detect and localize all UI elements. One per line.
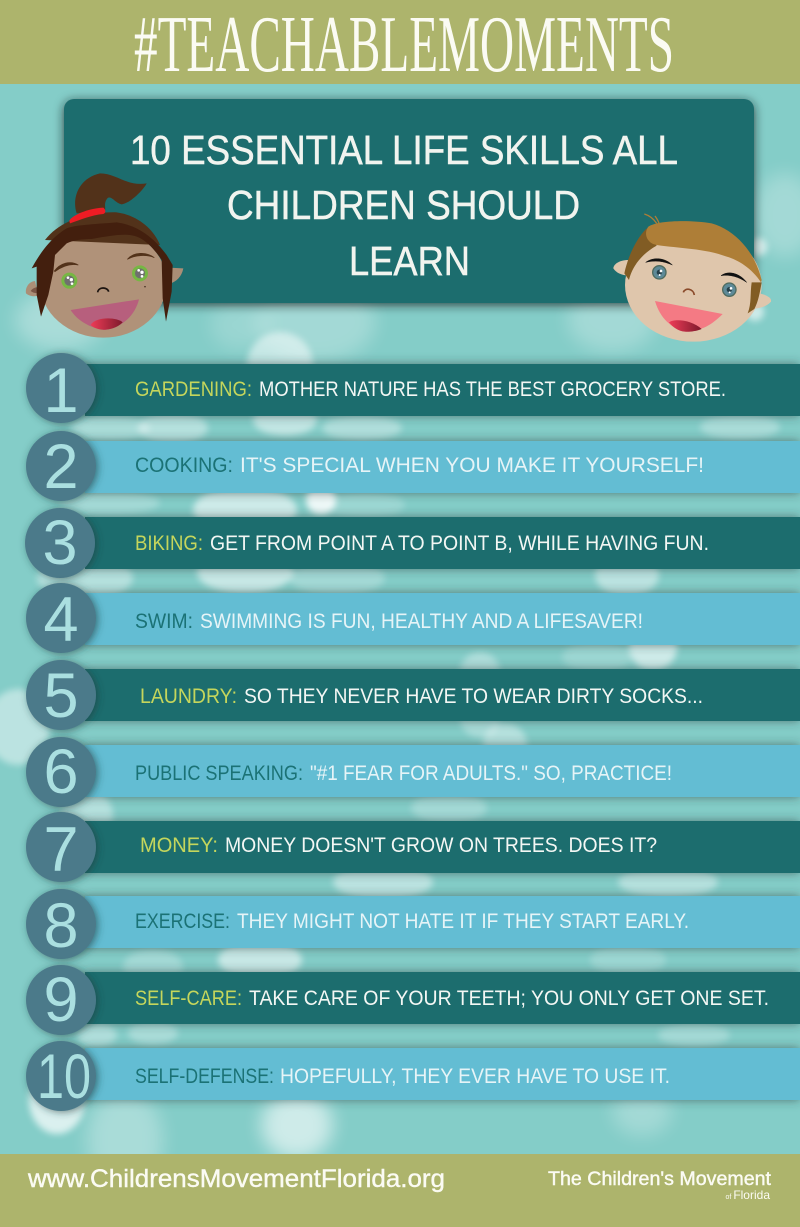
- skill 6: [26, 737, 800, 807]
- bar: [85, 517, 800, 569]
- number badge: [26, 812, 96, 882]
- description text: IT'S SPECIAL WHEN YOU MAKE IT YOURSELF!: [240, 454, 704, 477]
- numeral: 2: [43, 432, 79, 502]
- bar: [85, 593, 800, 645]
- numeral: 3: [42, 508, 78, 578]
- bar: [85, 669, 800, 721]
- description text: SWIMMING IS FUN, HEALTHY AND A LIFESAVER!: [200, 610, 643, 633]
- number badge: [25, 508, 95, 578]
- heading text: CHILDREN SHOULD: [227, 182, 580, 228]
- heading text: 10 ESSENTIAL LIFE SKILLS ALL: [130, 127, 678, 173]
- header band: [0, 0, 800, 84]
- footer logo text: [548, 1169, 772, 1202]
- panel background: [64, 99, 754, 303]
- bar: [85, 745, 800, 797]
- skill 9: [26, 965, 800, 1035]
- bar: [85, 972, 800, 1024]
- number badge: [26, 353, 96, 423]
- label text: SELF-CARE:: [135, 987, 242, 1010]
- label text: GARDENING:: [135, 378, 252, 401]
- footer band: [0, 1154, 800, 1227]
- number badge: [26, 965, 96, 1035]
- label text: COOKING:: [135, 454, 233, 477]
- bar: [85, 441, 800, 493]
- label text: SELF-DEFENSE:: [135, 1065, 274, 1088]
- icon: boy face: [613, 214, 771, 342]
- label text: SWIM:: [135, 610, 193, 633]
- description text: TAKE CARE OF YOUR TEETH; YOU ONLY GET ONE SET.: [249, 987, 769, 1010]
- numeral: 7: [43, 815, 79, 885]
- number badge: [26, 737, 96, 807]
- description text: GET FROM POINT A TO POINT B, WHILE HAVING FUN.: [210, 532, 709, 555]
- bar: [85, 364, 800, 416]
- label text: EXERCISE:: [135, 910, 230, 933]
- numeral: 8: [43, 891, 79, 961]
- label text: PUBLIC SPEAKING:: [135, 762, 303, 785]
- description text: MOTHER NATURE HAS THE BEST GROCERY STORE.: [259, 378, 726, 401]
- numeral: 10: [37, 1042, 91, 1112]
- footer logo text: of Florida: [726, 1188, 770, 1202]
- skill 3: [25, 508, 800, 578]
- description text: THEY MIGHT NOT HATE IT IF THEY START EARLY.: [237, 910, 689, 933]
- skill 7: [26, 812, 800, 885]
- icon: girl face: [26, 173, 183, 338]
- number badge: [26, 889, 96, 959]
- numeral: 1: [43, 356, 79, 426]
- description text: "#1 FEAR FOR ADULTS." SO, PRACTICE!: [310, 762, 672, 785]
- footer website url: www.ChildrensMovementFlorida.org: [27, 1165, 445, 1193]
- skill 8: [26, 889, 800, 961]
- label text: BIKING:: [135, 532, 203, 555]
- number badge: [26, 431, 96, 501]
- bar: [85, 896, 800, 948]
- number badge: [26, 660, 96, 730]
- number badge: [26, 583, 96, 653]
- numeral: 5: [43, 661, 79, 731]
- skill 1: [26, 353, 800, 426]
- label text: LAUNDRY:: [140, 685, 237, 708]
- numeral: 4: [43, 585, 79, 655]
- description text: HOPEFULLY, THEY EVER HAVE TO USE IT.: [280, 1065, 670, 1088]
- footer logo text: The Children's Movement: [548, 1169, 772, 1190]
- number badge: [26, 1041, 96, 1111]
- skill 2: [26, 431, 800, 502]
- bar: [85, 1048, 800, 1100]
- numeral: 6: [43, 737, 79, 807]
- panel: chalkboard heading: [64, 99, 754, 303]
- description text: SO THEY NEVER HAVE TO WEAR DIRTY SOCKS...: [244, 685, 703, 708]
- skill 10: [26, 1041, 800, 1112]
- skill 4: [26, 583, 800, 655]
- heading text: LEARN: [349, 238, 470, 284]
- numeral: 9: [43, 965, 79, 1035]
- bar: [85, 821, 800, 873]
- skill 5: [26, 660, 800, 731]
- heading text: [130, 127, 678, 284]
- description text: MONEY DOESN'T GROW ON TREES. DOES IT?: [225, 834, 657, 857]
- bokeh light spots: [0, 238, 780, 1134]
- label text: MONEY:: [140, 834, 218, 857]
